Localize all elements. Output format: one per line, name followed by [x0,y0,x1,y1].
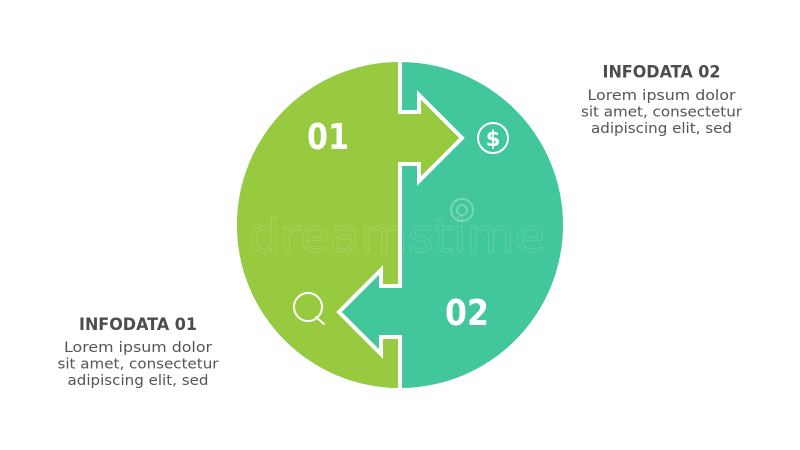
body copy: infodata 01: adipiscing elit, sed [68,373,208,389]
body copy: infodata 02: adipiscing elit, sed [591,121,732,137]
heading: infodata 01: INFODATA 01 [79,315,197,335]
icon: magnifier [294,293,324,324]
text block: infodata 01 [58,315,219,389]
icon: dollar coin: $ [486,127,500,151]
body copy: infodata 01 [58,340,219,389]
interlocking arrow divider [339,58,462,392]
watermark wordmark: dreamstime [249,209,545,263]
number 01: 01 [307,117,349,158]
circle diagram [237,58,563,392]
body copy: infodata 01: Lorem ipsum dolor [64,340,212,356]
body copy: infodata 02 [581,88,742,137]
icon: dollar coin [478,123,508,153]
number 02: 02 [445,293,489,334]
heading: infodata 02: INFODATA 02 [602,62,720,82]
text block: infodata 02 [581,62,742,137]
body copy: infodata 02: Lorem ipsum dolor [588,88,736,104]
panel: teal segment 02 [237,62,563,388]
watermark [249,199,545,263]
body copy: infodata 01: sit amet, consectetur [58,356,219,372]
watermark spiral [451,199,473,221]
panel: green segment 01 [237,62,462,388]
body copy: infodata 02: sit amet, consectetur [581,104,742,120]
